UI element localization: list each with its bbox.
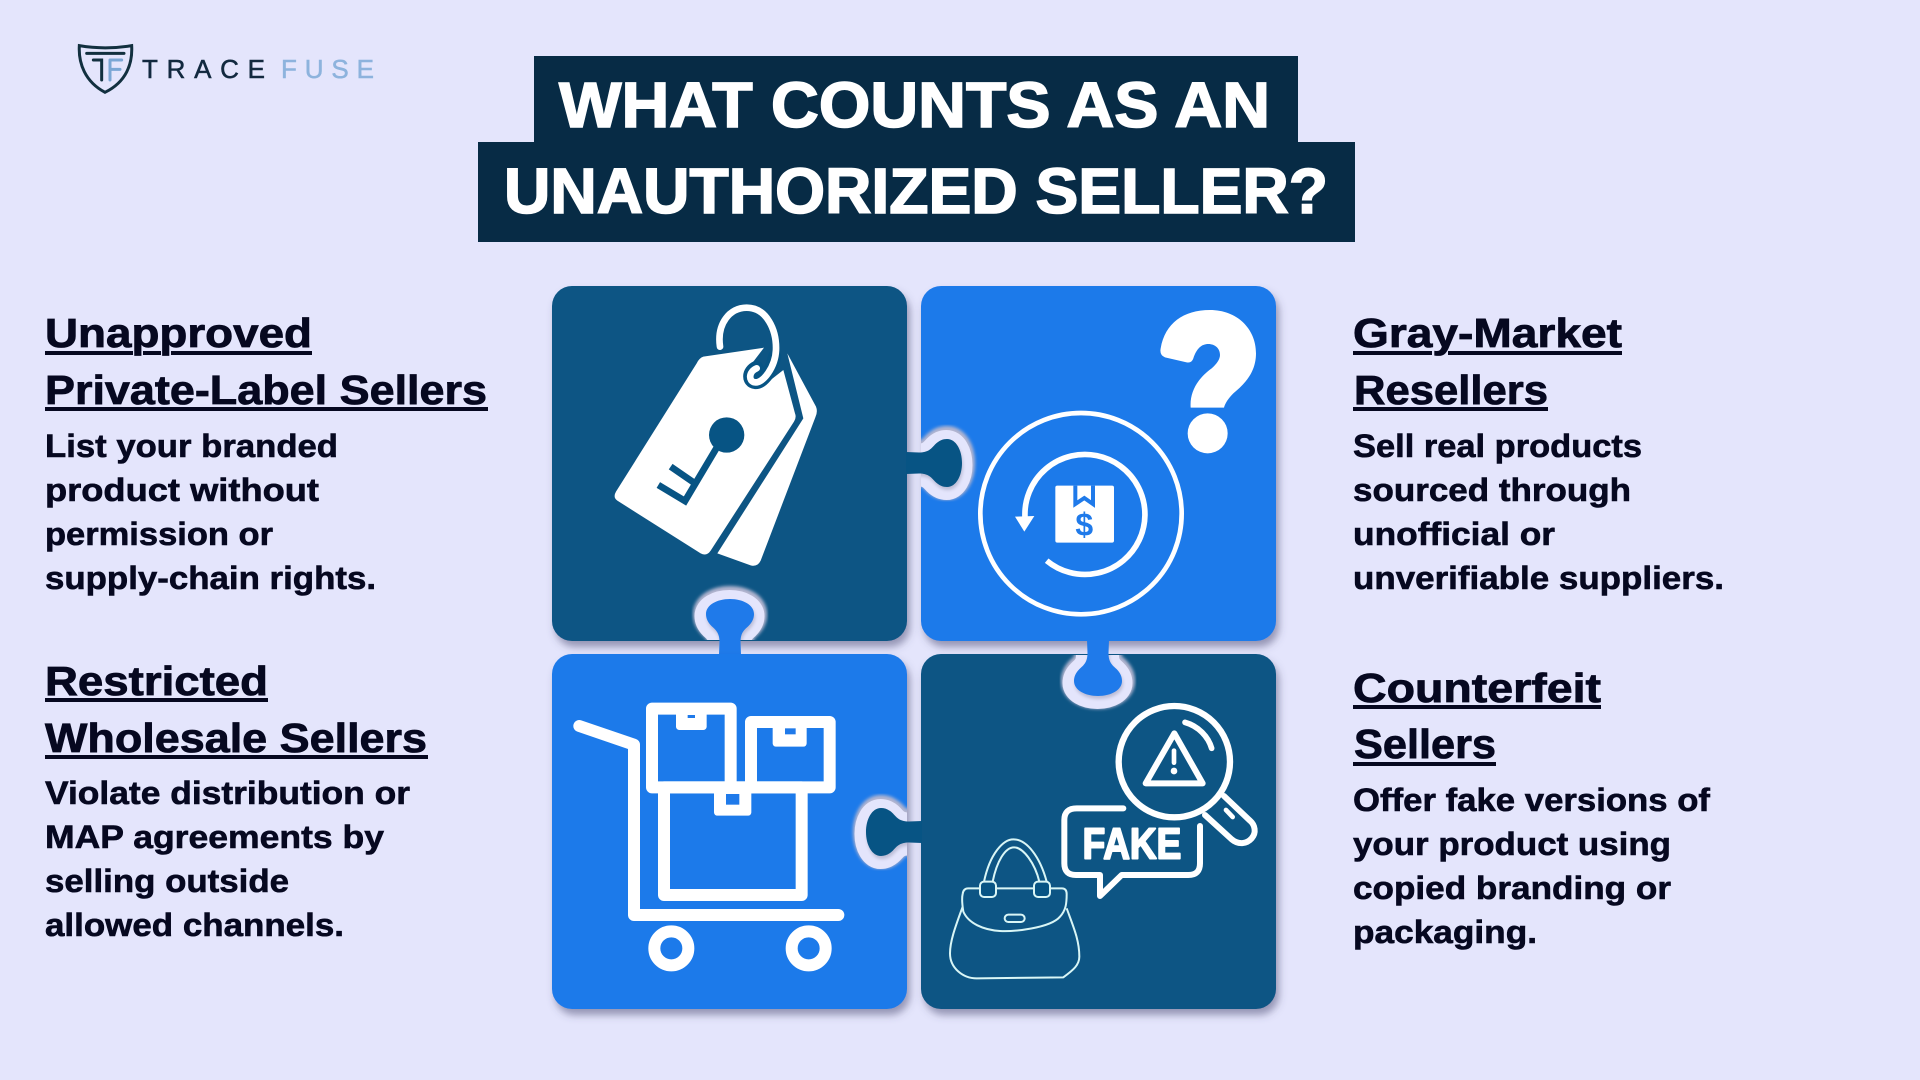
logo: Trace Fuse: FUSE xyxy=(281,54,374,84)
text block: counterfeit sellers xyxy=(1353,665,1710,950)
icon: circular return with dollar box: $ xyxy=(1075,507,1093,543)
title xyxy=(478,56,1355,242)
panel: puzzle bottom-right, counterfeit xyxy=(921,640,1276,1009)
text block: restricted wholesale sellers: allowed channels. xyxy=(45,907,344,943)
text block: restricted wholesale sellers: MAP agreements by xyxy=(45,819,384,855)
text block: counterfeit sellers: Offer fake versions of xyxy=(1353,782,1710,818)
panel: puzzle top-right, returns and question xyxy=(906,286,1276,641)
text block: restricted wholesale sellers: Restricted xyxy=(45,658,268,704)
text block: gray-market resellers: unofficial or xyxy=(1353,516,1555,552)
text block: restricted wholesale sellers xyxy=(45,658,428,943)
text block: counterfeit sellers: Sellers xyxy=(1354,721,1496,767)
text block: gray-market resellers: Resellers xyxy=(1354,367,1548,413)
text block: unapproved private-label sellers: product without xyxy=(45,472,319,508)
icon: fake speech bubble xyxy=(1064,808,1200,896)
text block: restricted wholesale sellers: Wholesale Sellers xyxy=(45,715,427,761)
text block: counterfeit sellers: copied branding or xyxy=(1353,870,1671,906)
icon: magnifier with warning xyxy=(1119,706,1255,843)
icon: question mark xyxy=(1160,310,1256,453)
text block: gray-market resellers: sourced through xyxy=(1353,472,1631,508)
text block: gray-market resellers: Sell real products xyxy=(1353,428,1642,464)
text block: restricted wholesale sellers: Violate distribution or xyxy=(45,775,410,811)
icon: cart with boxes xyxy=(579,709,838,965)
panel: puzzle top-left, price tag xyxy=(552,286,907,658)
title: UNAUTHORIZED SELLER? xyxy=(504,155,1328,227)
text block: counterfeit sellers: packaging. xyxy=(1353,914,1537,950)
text block: gray-market resellers: Gray-Market xyxy=(1353,310,1622,356)
text block: unapproved private-label sellers: List your branded xyxy=(45,428,338,464)
icon: circular return with dollar box xyxy=(980,413,1182,614)
icon: handbag xyxy=(950,839,1079,978)
text block: gray-market resellers xyxy=(1353,310,1724,596)
text block: unapproved private-label sellers: Private-Label Sellers xyxy=(45,367,487,413)
title: WHAT COUNTS AS AN xyxy=(559,69,1270,141)
icon: fake speech bubble: FAKE xyxy=(1083,819,1181,868)
logo: Trace Fuse xyxy=(79,46,374,92)
text block: gray-market resellers: unverifiable suppliers. xyxy=(1353,560,1724,596)
panel: puzzle bottom-left, cart xyxy=(552,654,923,1009)
text block: counterfeit sellers: your product using xyxy=(1353,826,1671,862)
icon: shield logo mark xyxy=(79,46,132,92)
text block: restricted wholesale sellers: selling outside xyxy=(45,863,289,899)
logo wordmark: TRACE xyxy=(142,54,265,84)
text block: unapproved private-label sellers: Unapproved xyxy=(45,310,312,356)
text block: unapproved private-label sellers: supply-chain rights. xyxy=(45,560,376,596)
infographic canvas xyxy=(44,44,1722,1020)
icon: price tags with key xyxy=(615,308,817,566)
text block: counterfeit sellers: Counterfeit xyxy=(1353,665,1601,711)
text block: unapproved private-label sellers: permission or xyxy=(45,516,273,552)
text block: unapproved private-label sellers xyxy=(45,310,488,596)
